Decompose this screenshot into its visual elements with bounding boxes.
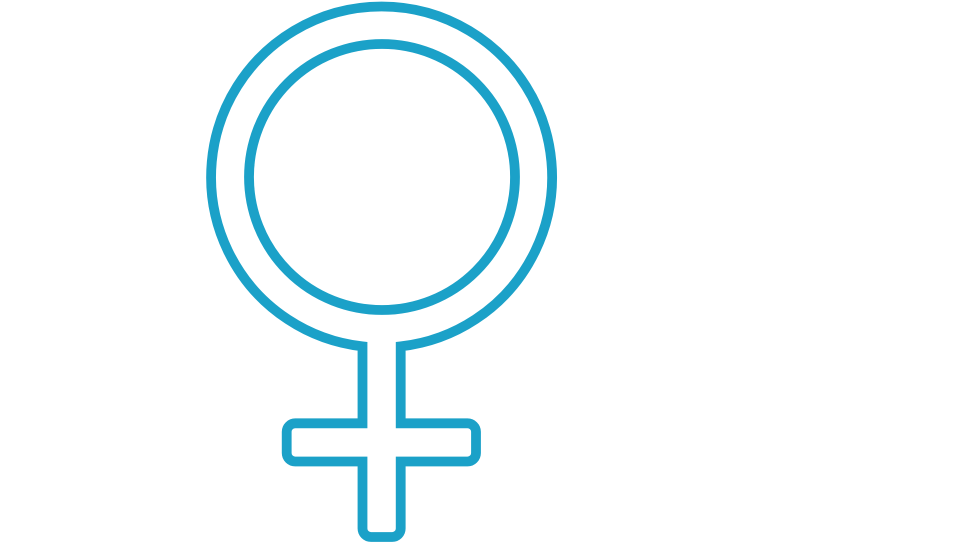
outer outline: ring, stem and crossbar xyxy=(211,6,552,537)
inner circle xyxy=(249,44,515,310)
